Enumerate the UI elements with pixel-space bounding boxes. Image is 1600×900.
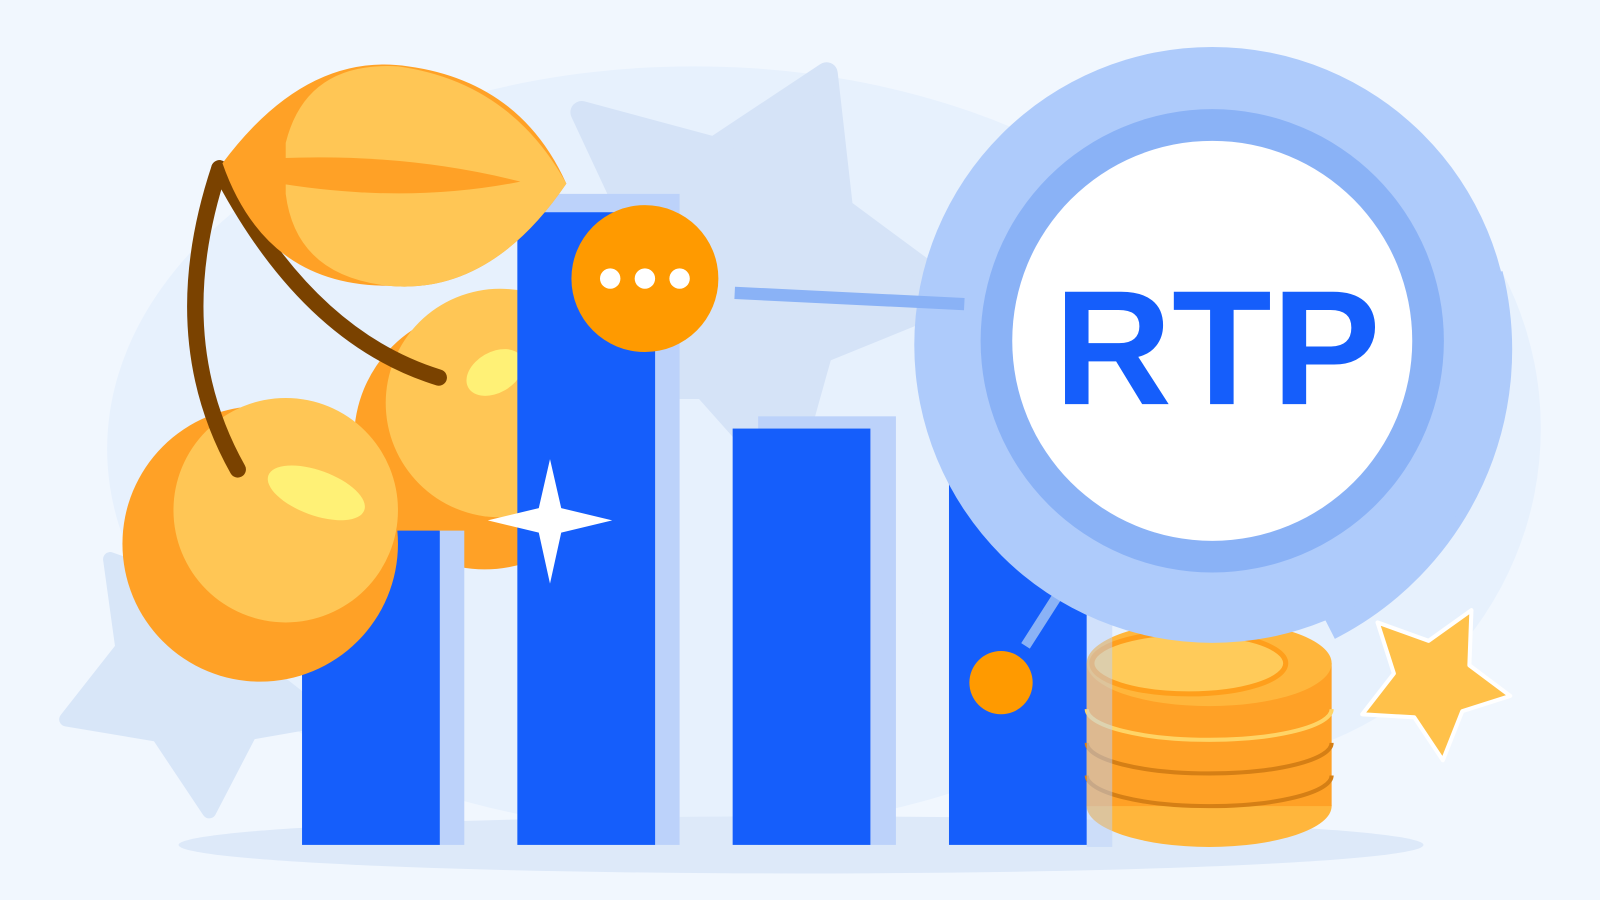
icon: chat bubble [571, 205, 718, 352]
cherry: back [354, 289, 615, 569]
arc segments around magnifier [1327, 276, 1494, 622]
icon: sparkle [488, 459, 612, 584]
connector line [735, 293, 964, 304]
background star: left [66, 531, 327, 811]
bar chart [302, 194, 1087, 845]
background blobs [107, 66, 1541, 832]
icon: gold star [1362, 610, 1510, 760]
cherry: front with stems and leaf [122, 64, 566, 682]
coin stack [1087, 612, 1332, 847]
magnifier [914, 47, 1510, 714]
background star: center [571, 73, 959, 480]
RTP label: RTP [1054, 256, 1381, 439]
ground shadow [179, 816, 1423, 873]
